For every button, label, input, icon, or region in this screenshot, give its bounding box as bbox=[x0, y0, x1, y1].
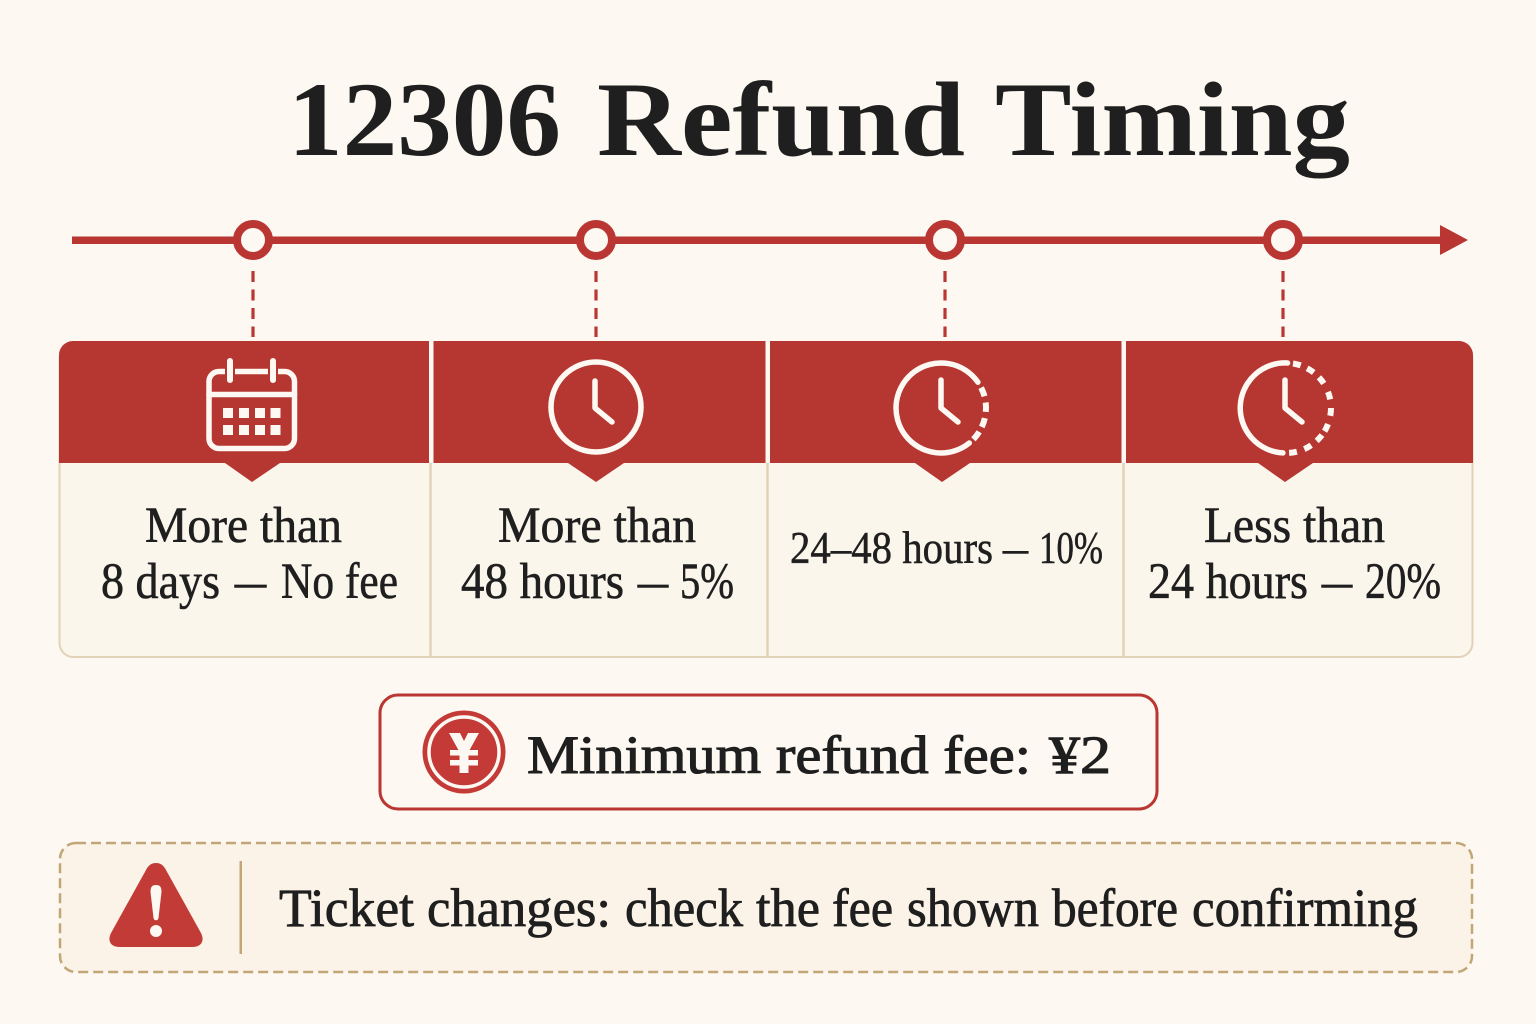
card 3 text: – bbox=[1002, 523, 1029, 573]
card 1 text: 8 days bbox=[101, 554, 220, 610]
timeline marker 4 bbox=[1267, 224, 1299, 256]
card 2 text bbox=[461, 498, 734, 610]
card 2 text: 48 hours bbox=[461, 554, 624, 610]
card 2 text: – bbox=[637, 554, 669, 610]
icon: warning triangle bbox=[109, 863, 203, 947]
icon: clock full bbox=[551, 362, 641, 452]
header separators bbox=[429, 341, 1126, 463]
note text: shown bbox=[907, 878, 1039, 938]
icon: clock partly dashed bbox=[896, 363, 986, 453]
note text: the bbox=[756, 878, 820, 938]
callout box bbox=[380, 695, 1157, 809]
red header band bbox=[59, 341, 1473, 463]
panel: refund tiers bbox=[59, 341, 1473, 657]
card body background bbox=[60, 345, 1472, 657]
note text bbox=[279, 878, 1418, 938]
note text: before bbox=[1052, 878, 1178, 938]
timeline marker 2 bbox=[580, 224, 612, 256]
card 1 text: No fee bbox=[281, 554, 398, 610]
icon: yen coin bbox=[422, 710, 506, 794]
note text: Ticket bbox=[279, 878, 414, 938]
note: ticket changes bbox=[60, 843, 1472, 972]
card 1 text: More than bbox=[145, 498, 342, 554]
icon: clock mostly dashed bbox=[1240, 363, 1331, 453]
timeline axis arrow bbox=[72, 225, 1468, 255]
note text: changes: bbox=[427, 878, 611, 938]
timeline marker 3 bbox=[929, 224, 961, 256]
note box bbox=[60, 843, 1472, 972]
callout text: ¥2 bbox=[1049, 725, 1111, 785]
note text: check bbox=[625, 878, 743, 938]
title: Timing bbox=[995, 61, 1350, 178]
dashed connectors bbox=[253, 271, 1283, 337]
card 4 text: 24 hours bbox=[1148, 554, 1308, 610]
note divider bbox=[240, 861, 242, 954]
title bbox=[288, 61, 1350, 178]
callout text: Minimum refund fee: bbox=[527, 725, 1031, 785]
card 4 text: Less than bbox=[1204, 498, 1385, 554]
card dividers bbox=[430, 460, 1124, 656]
note text: fee bbox=[832, 878, 893, 938]
title: Refund bbox=[597, 61, 965, 178]
title: 12306 bbox=[288, 61, 561, 178]
callout: minimum refund fee bbox=[380, 695, 1157, 809]
timeline marker 1 bbox=[237, 224, 269, 256]
card 1 text bbox=[101, 498, 398, 610]
card 4 text bbox=[1148, 498, 1441, 610]
card 3 text: 10% bbox=[1039, 523, 1103, 573]
header pointers bbox=[225, 463, 1313, 482]
timeline bbox=[72, 224, 1468, 337]
note text: confirming bbox=[1192, 878, 1418, 938]
card 2 text: 5% bbox=[680, 554, 734, 610]
card 3 text: 24–48 hours bbox=[790, 523, 993, 573]
card 4 text: 20% bbox=[1365, 554, 1441, 610]
card 1 text: – bbox=[234, 554, 267, 610]
card 2 text: More than bbox=[498, 498, 696, 554]
icon: calendar bbox=[209, 361, 294, 448]
card 4 text: – bbox=[1321, 554, 1353, 610]
